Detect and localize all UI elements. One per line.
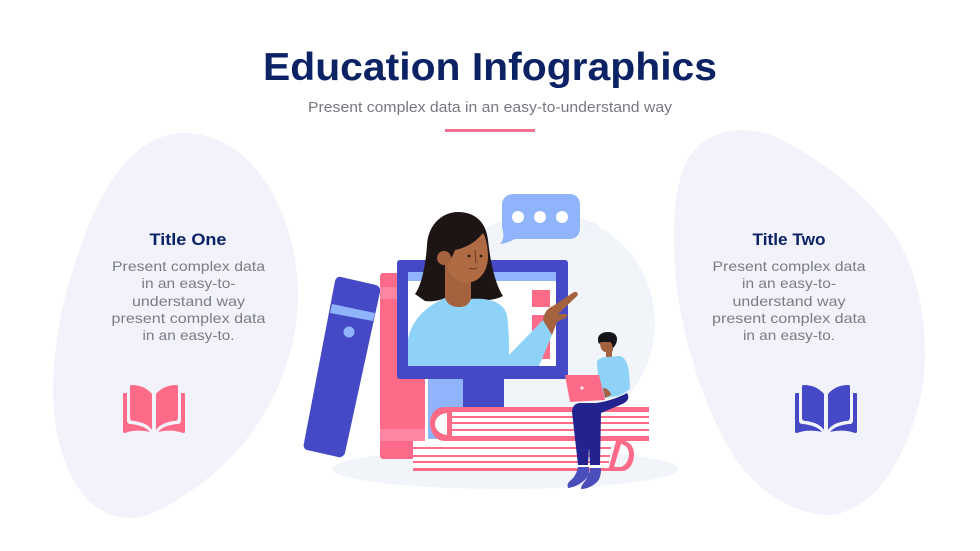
ground shadow xyxy=(332,449,678,489)
text block: right description: understand way xyxy=(732,293,846,309)
icon: speech bubble xyxy=(500,194,580,244)
face xyxy=(447,233,488,283)
tilted blue book xyxy=(304,277,380,457)
torso and arm xyxy=(408,298,552,366)
stacked book top xyxy=(430,407,649,441)
illustration: education scene xyxy=(304,194,678,489)
title underline accent xyxy=(445,129,535,132)
text block: right description xyxy=(712,258,866,343)
heading: title one: Title One xyxy=(150,230,226,249)
text block: right description: in an easy-to. xyxy=(743,327,835,343)
panel: right blob xyxy=(674,130,925,515)
text block: left description: Present complex data xyxy=(112,258,265,274)
subtitle: Present complex data in an easy-to-understand way xyxy=(308,99,673,116)
shirt xyxy=(597,356,630,398)
screen tiles xyxy=(532,290,550,307)
monitor frame xyxy=(397,260,568,379)
neck xyxy=(445,262,471,307)
text block: left description: in an easy-to- xyxy=(142,275,236,291)
monitor stand xyxy=(425,379,428,441)
text block: right description: present complex data xyxy=(712,310,866,326)
upright pink book xyxy=(380,273,428,459)
text block: right description: in an easy-to- xyxy=(742,275,836,291)
hair xyxy=(415,212,503,301)
text block: left description xyxy=(112,258,266,343)
text block: left description: present complex data xyxy=(112,310,266,326)
trousers xyxy=(572,393,628,465)
icon: open book blue xyxy=(795,385,857,433)
hair xyxy=(598,332,617,348)
icon: open book pink xyxy=(123,385,185,433)
monitor xyxy=(397,260,568,441)
monitor screen xyxy=(408,272,556,366)
ear xyxy=(437,251,451,265)
laptop xyxy=(565,375,605,402)
seated student figure xyxy=(565,332,630,489)
face and neck xyxy=(600,342,613,358)
teacher figure xyxy=(408,212,578,366)
text block: left description: understand way xyxy=(132,293,245,309)
text block: right description: Present complex data xyxy=(712,258,866,274)
background circle xyxy=(433,212,655,434)
small bubble dot xyxy=(584,222,600,238)
text block: left description: in an easy-to. xyxy=(142,327,234,343)
heading: title two: Title Two xyxy=(752,230,826,249)
hand xyxy=(543,292,578,335)
shoes xyxy=(568,467,589,488)
eyes and mouth xyxy=(468,255,470,257)
panel: left blob xyxy=(53,133,298,518)
title: Education Infographics xyxy=(263,46,717,89)
hand on laptop xyxy=(603,388,611,398)
stacked book bottom xyxy=(413,441,634,471)
